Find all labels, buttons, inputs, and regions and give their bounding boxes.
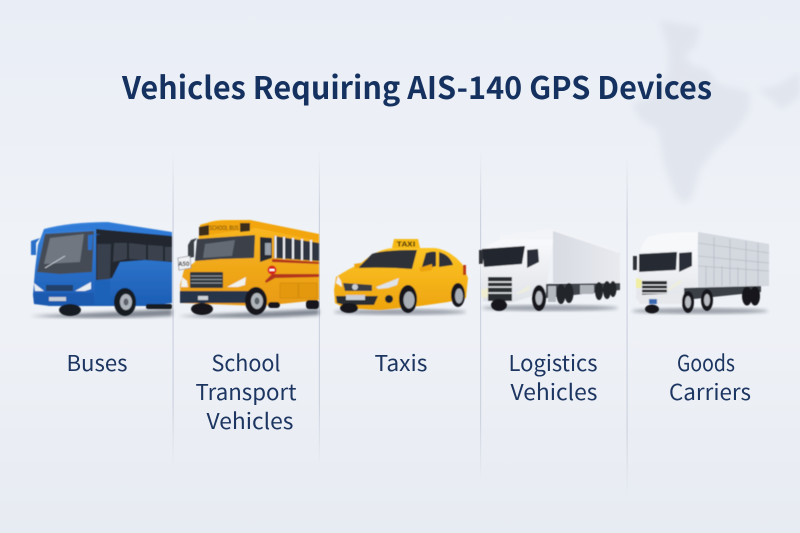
icon: taxi: TAXI <box>396 238 416 248</box>
title: Vehicles Requiring AIS-140 GPS Devices <box>121 63 712 108</box>
label: Logistics Vehicles: Vehicles <box>510 375 598 407</box>
icon: school bus: SCHOOL BUS <box>210 223 239 232</box>
label: Goods Carriers: Goods <box>677 346 735 378</box>
label: School Transport Vehicles: Vehicles <box>206 404 294 436</box>
label: Logistics Vehicles <box>508 346 598 407</box>
label: Buses: Buses <box>66 346 128 378</box>
icon: goods carrier truck <box>632 232 769 314</box>
label: School Transport Vehicles: Transport <box>196 375 296 407</box>
label: Taxis: Taxis <box>374 346 428 378</box>
label: Goods Carriers: Carriers <box>669 375 751 407</box>
icon: school bus <box>178 220 319 318</box>
icon: school bus: A50 <box>178 259 190 268</box>
icon: taxi <box>334 238 468 315</box>
label: School Transport Vehicles: School <box>212 346 280 378</box>
label: Goods Carriers <box>669 346 751 407</box>
icon: logistics truck <box>479 229 620 311</box>
icon: blue bus <box>30 222 172 318</box>
label: School Transport Vehicles <box>196 346 296 436</box>
label: Logistics Vehicles: Logistics <box>508 346 598 378</box>
background map of India <box>632 20 800 204</box>
